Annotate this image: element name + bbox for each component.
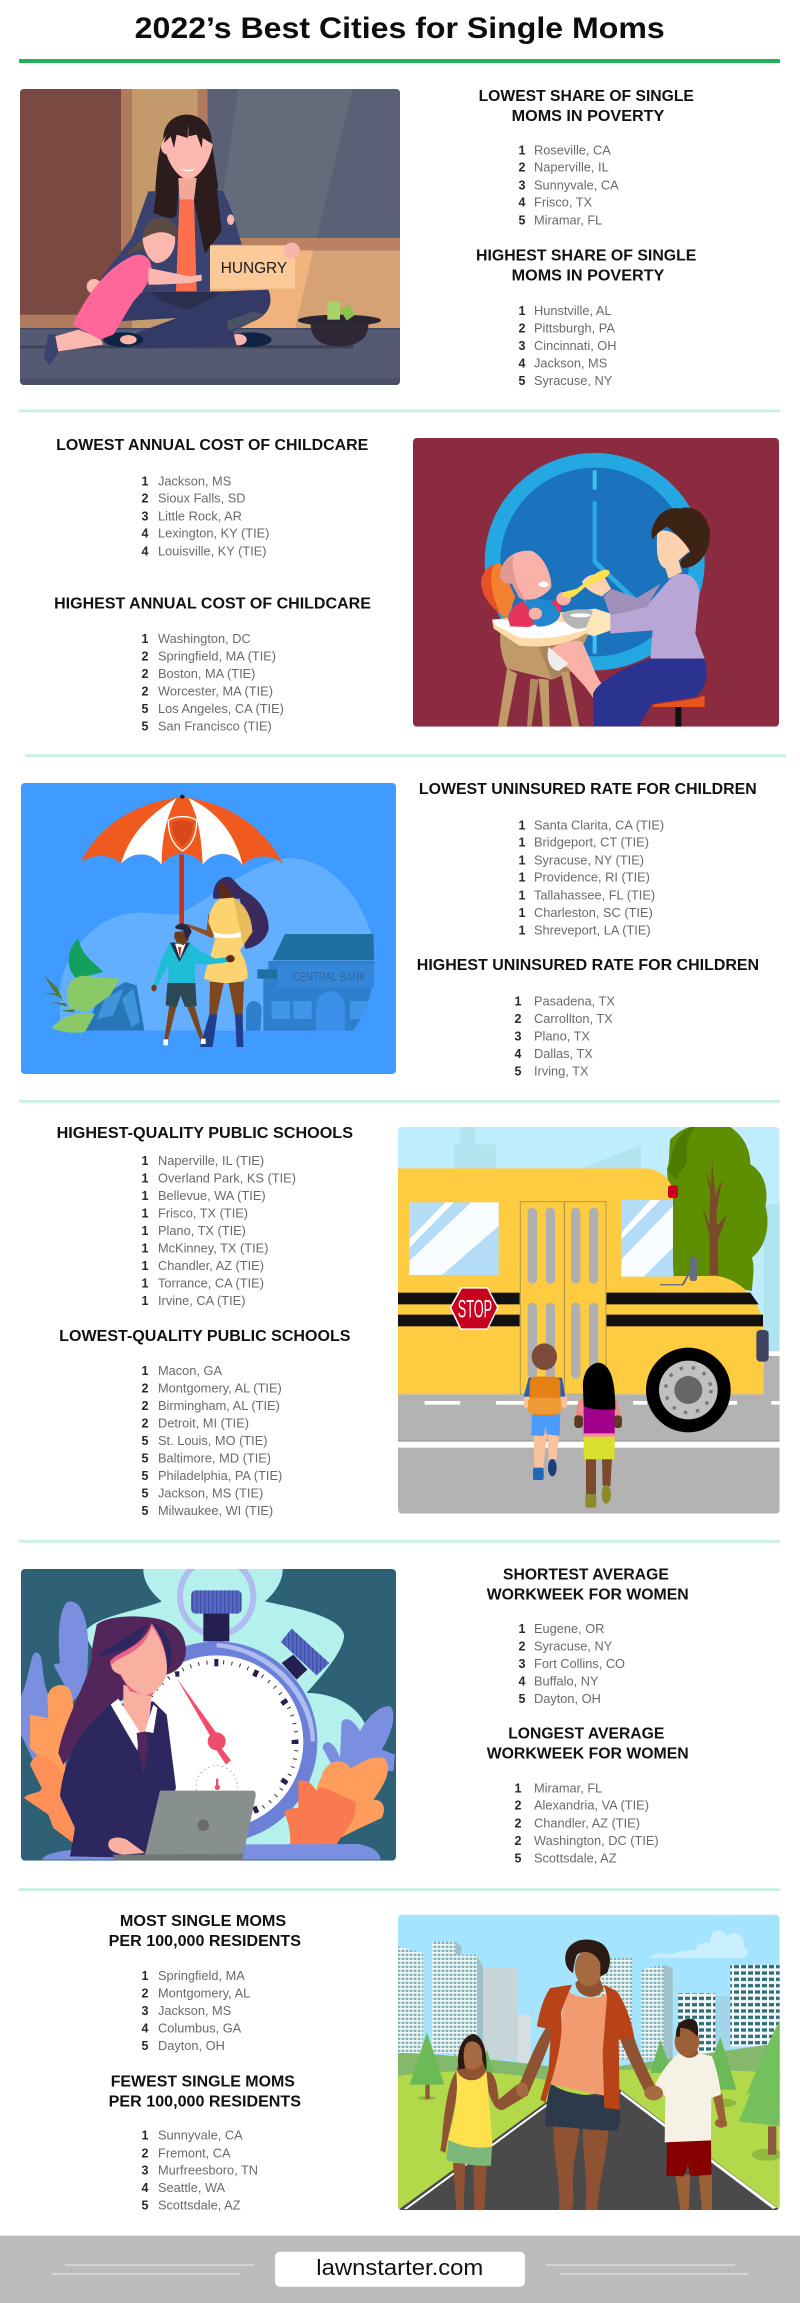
illustration: mother walking with two children in city park [398,1915,782,2210]
list: highest-quality school cities: McKinney, TX (TIE) [158,1240,268,1255]
list: highest-quality school cities: 1 [142,1171,149,1185]
list: shortest workweek cities: 4 [519,1675,526,1689]
list: highest-quality school cities: Chandler, AZ (TIE) [158,1258,264,1273]
list: highest-quality school cities: 1 [142,1276,149,1290]
list: highest-quality school cities: Naperville, IL (TIE) [158,1153,264,1168]
list: highest uninsured cities: 3 [515,1029,522,1043]
heading: lowest-quality public schools: LOWEST-QUALITY PUBLIC SCHOOLS [59,1328,351,1345]
list: lowest-quality school cities [142,1363,282,1518]
list: lowest uninsured cities [519,817,664,937]
list: highest-quality school cities: 1 [142,1189,149,1203]
list: shortest workweek cities: Fort Collins, CO [534,1656,625,1671]
list: fewest single moms cities: 5 [142,2199,149,2213]
list: lowest childcare cities [142,473,269,558]
list: highest childcare cities: 2 [142,667,149,681]
list: highest poverty cities: Cincinnati, OH [534,338,616,353]
list: highest-quality school cities: Overland Park, KS (TIE) [158,1170,296,1185]
list: highest-quality school cities: Bellevue, WA (TIE) [158,1188,266,1203]
list: highest-quality school cities: Torrance, CA (TIE) [158,1275,264,1290]
sign text: hungry: HUNGRY [221,260,288,277]
heading: highest share of single moms in poverty [476,248,697,285]
heading: lowest share of single moms in poverty [479,88,694,125]
list: shortest workweek cities: 1 [519,1622,526,1636]
list: most single moms cities: 2 [142,1986,149,2000]
illustration: mother and son under insurance umbrella [21,783,396,1074]
list: highest childcare cities: San Francisco (TIE) [158,718,272,733]
illustration: woman at laptop with stopwatch [21,1558,396,1861]
list: highest-quality school cities: Frisco, TX (TIE) [158,1205,248,1220]
list: longest workweek cities: Washington, DC (TIE) [534,1833,659,1848]
list: highest childcare cities: Worcester, MA (TIE) [158,683,273,698]
list: lowest poverty cities: Sunnyvale, CA [534,177,619,192]
panel: childcare rankings [54,437,371,733]
panel: poverty rankings [476,88,697,388]
list: lowest-quality school cities: 2 [142,1416,149,1430]
list: longest workweek cities: Chandler, AZ (TIE) [534,1815,640,1830]
list: highest uninsured cities: 2 [515,1012,522,1026]
list: highest poverty cities: 3 [519,339,526,353]
heading: shortest average workweek [487,1567,689,1604]
list: lowest childcare cities: Sioux Falls, SD [158,491,245,506]
panel: single mom population rankings [109,1913,301,2213]
list: lowest-quality school cities: Philadelphia, PA (TIE) [158,1468,282,1483]
heading: shortest average workweek: WORKWEEK FOR WOMEN [487,1587,689,1604]
list: highest poverty cities: Hunstville, AL [534,303,612,318]
list: highest poverty cities [519,303,616,388]
list: lowest-quality school cities: 2 [142,1381,149,1395]
list: shortest workweek cities: Syracuse, NY [534,1639,613,1654]
sign text: central bank: CENTRAL BANK [293,970,366,984]
sign text: stop: STOP [458,1296,492,1324]
footer logo box [275,2252,525,2287]
list: lowest-quality school cities: Montgomery, AL (TIE) [158,1380,282,1395]
list: fewest single moms cities: 2 [142,2146,149,2160]
list: fewest single moms cities: Scottsdale, AZ [158,2198,241,2213]
list: lowest childcare cities: Louisville, KY (TIE) [158,543,267,558]
list: lowest poverty cities [519,142,619,227]
heading: lowest share of single moms in poverty: MOMS IN POVERTY [512,108,665,125]
list: most single moms cities: 5 [142,2039,149,2053]
list: most single moms cities: 4 [142,2021,149,2035]
list: shortest workweek cities: Buffalo, NY [534,1674,599,1689]
list: fewest single moms cities: 1 [142,2129,149,2143]
list: most single moms cities: Jackson, MS [158,2003,231,2018]
list: shortest workweek cities: 2 [519,1640,526,1654]
list: lowest childcare cities: Lexington, KY (TIE) [158,526,269,541]
list: highest uninsured cities: Pasadena, TX [534,993,615,1008]
list: highest poverty cities: Pittsburgh, PA [534,320,615,335]
title: 2022’s Best Cities for Single Moms [135,12,665,45]
list: highest childcare cities: 2 [142,649,149,663]
heading: highest uninsured rate: HIGHEST UNINSURED RATE FOR CHILDREN [417,957,759,974]
list: longest workweek cities: 2 [515,1834,522,1848]
list: lowest uninsured cities: Tallahassee, FL (TIE) [534,887,655,902]
list: longest workweek cities [515,1780,659,1865]
list: highest poverty cities: Syracuse, NY [534,373,613,388]
list: highest childcare cities: Los Angeles, CA (TIE) [158,701,284,716]
list: lowest uninsured cities: 1 [519,888,526,902]
panel: workweek rankings [487,1567,689,1865]
heading: highest share of single moms in poverty: HIGHEST SHARE OF SINGLE [476,248,697,265]
list: lowest childcare cities: 3 [142,509,149,523]
heading: highest annual cost of childcare: HIGHEST ANNUAL COST OF CHILDCARE [54,596,371,613]
list: lowest-quality school cities: 2 [142,1399,149,1413]
list: highest childcare cities: 1 [142,632,149,646]
list: lowest-quality school cities: 5 [142,1469,149,1483]
list: shortest workweek cities [519,1621,625,1706]
list: longest workweek cities: 5 [515,1851,522,1865]
list: lowest poverty cities: Miramar, FL [534,212,602,227]
list: most single moms cities: Dayton, OH [158,2038,225,2053]
illustration: mother feeding baby in high chair [413,438,779,727]
heading: fewest single moms: FEWEST SINGLE MOMS [111,2073,295,2090]
list: lowest uninsured cities: Syracuse, NY (TIE) [534,852,644,867]
list: lowest uninsured cities: Charleston, SC (TIE) [534,905,653,920]
list: highest uninsured cities [515,993,615,1079]
list: highest uninsured cities: Plano, TX [534,1028,590,1043]
list: lowest uninsured cities: 1 [519,853,526,867]
list: lowest poverty cities: Roseville, CA [534,142,611,157]
list: highest childcare cities: Boston, MA (TIE) [158,666,255,681]
list: lowest childcare cities: Little Rock, AR [158,508,242,523]
list: highest poverty cities: 1 [519,304,526,318]
list: highest childcare cities [142,631,284,733]
list: most single moms cities: 1 [142,1969,149,1983]
list: highest uninsured cities: Carrollton, TX [534,1011,613,1026]
list: longest workweek cities: Alexandria, VA (TIE) [534,1798,649,1813]
list: lowest poverty cities: 1 [519,143,526,157]
list: lowest poverty cities: 3 [519,178,526,192]
heading: fewest single moms [109,2073,301,2110]
list: shortest workweek cities: Eugene, OR [534,1621,604,1636]
heading: lowest uninsured rate: LOWEST UNINSURED RATE FOR CHILDREN [419,781,757,798]
list: shortest workweek cities: 5 [519,1692,526,1706]
list: lowest-quality school cities: 5 [142,1486,149,1500]
list: highest poverty cities: 2 [519,321,526,335]
list: highest-quality school cities: 1 [142,1294,149,1308]
list: fewest single moms cities: 4 [142,2181,149,2195]
list: lowest poverty cities: 4 [519,196,526,210]
list: lowest childcare cities: 4 [142,544,149,558]
list: lowest childcare cities: 4 [142,527,149,541]
heading: most single moms [109,1913,301,1950]
panel: uninsured children rankings [417,781,759,1079]
list: lowest uninsured cities: Santa Clarita, CA (TIE) [534,817,664,832]
list: fewest single moms cities [142,2128,258,2213]
list: fewest single moms cities: Murfreesboro, TN [158,2163,258,2178]
list: lowest-quality school cities: Detroit, MI (TIE) [158,1415,249,1430]
list: lowest-quality school cities: St. Louis, MO (TIE) [158,1433,268,1448]
heading: highest share of single moms in poverty: MOMS IN POVERTY [512,268,665,285]
list: highest-quality school cities: 1 [142,1154,149,1168]
list: most single moms cities [142,1968,250,2053]
list: fewest single moms cities: Seattle, WA [158,2180,226,2195]
list: highest childcare cities: Springfield, MA (TIE) [158,648,276,663]
list: most single moms cities: 3 [142,2004,149,2018]
list: highest-quality school cities: 1 [142,1241,149,1255]
list: highest-quality school cities: Irvine, CA (TIE) [158,1293,245,1308]
list: lowest-quality school cities: Jackson, MS (TIE) [158,1485,263,1500]
list: lowest poverty cities: 5 [519,213,526,227]
list: fewest single moms cities: Sunnyvale, CA [158,2128,243,2143]
list: lowest poverty cities: 2 [519,161,526,175]
heading: most single moms: PER 100,000 RESIDENTS [109,1933,301,1950]
list: lowest uninsured cities: 1 [519,871,526,885]
heading: fewest single moms: PER 100,000 RESIDENTS [109,2093,301,2110]
heading: shortest average workweek: SHORTEST AVERAGE [503,1567,669,1584]
list: lowest childcare cities: 1 [142,474,149,488]
list: lowest-quality school cities: Baltimore, MD (TIE) [158,1450,271,1465]
list: longest workweek cities: 2 [515,1816,522,1830]
list: highest-quality school cities: 1 [142,1206,149,1220]
list: lowest uninsured cities: Bridgeport, CT (TIE) [534,835,649,850]
footer bar [0,2236,800,2303]
list: highest uninsured cities: Irving, TX [534,1064,589,1079]
heading: longest average workweek: LONGEST AVERAGE [508,1726,665,1743]
list: highest childcare cities: 5 [142,719,149,733]
panel: public school rankings [57,1125,353,1518]
list: highest-quality school cities: 1 [142,1224,149,1238]
list: highest childcare cities: 5 [142,702,149,716]
heading: lowest annual cost of childcare: LOWEST ANNUAL COST OF CHILDCARE [56,437,369,454]
heading: longest average workweek: WORKWEEK FOR WOMEN [487,1746,689,1763]
list: lowest-quality school cities: Macon, GA [158,1363,222,1378]
heading: lowest share of single moms in poverty: LOWEST SHARE OF SINGLE [479,88,694,105]
illustration: mother and child begging with hungry sign [20,89,400,385]
list: fewest single moms cities: Fremont, CA [158,2145,231,2160]
list: most single moms cities: Montgomery, AL [158,1985,250,2000]
list: highest uninsured cities: 5 [515,1065,522,1079]
list: lowest poverty cities: Naperville, IL [534,160,609,175]
list: highest-quality school cities: 1 [142,1259,149,1273]
list: longest workweek cities: Miramar, FL [534,1780,602,1795]
heading: longest average workweek [487,1726,689,1763]
list: lowest uninsured cities: 1 [519,818,526,832]
list: most single moms cities: Springfield, MA [158,1968,245,1983]
list: shortest workweek cities: Dayton, OH [534,1691,601,1706]
list: lowest uninsured cities: 1 [519,906,526,920]
list: lowest-quality school cities: 5 [142,1504,149,1518]
list: lowest-quality school cities: 1 [142,1364,149,1378]
list: lowest poverty cities: Frisco, TX [534,195,593,210]
illustration: school bus with two children [398,1127,780,1514]
list: lowest-quality school cities: Birmingham, AL (TIE) [158,1398,280,1413]
footer logo box: lawnstarter.com [316,2255,483,2280]
list: highest poverty cities: Jackson, MS [534,355,607,370]
list: lowest uninsured cities: 1 [519,836,526,850]
list: lowest uninsured cities: Shreveport, LA (TIE) [534,922,651,937]
list: lowest childcare cities: 2 [142,492,149,506]
list: lowest-quality school cities: 5 [142,1434,149,1448]
list: longest workweek cities: Scottsdale, AZ [534,1850,617,1865]
list: lowest-quality school cities: 5 [142,1451,149,1465]
list: longest workweek cities: 2 [515,1799,522,1813]
list: lowest-quality school cities: Milwaukee, WI (TIE) [158,1503,273,1518]
list: lowest uninsured cities: 1 [519,923,526,937]
list: most single moms cities: Columbus, GA [158,2020,242,2035]
list: longest workweek cities: 1 [515,1781,522,1795]
list: highest poverty cities: 5 [519,374,526,388]
list: highest uninsured cities: 1 [515,994,522,1008]
list: highest-quality school cities: Plano, TX (TIE) [158,1223,246,1238]
list: highest-quality school cities [142,1153,296,1308]
list: lowest childcare cities: Jackson, MS [158,473,231,488]
heading: highest-quality public schools: HIGHEST-QUALITY PUBLIC SCHOOLS [57,1125,353,1142]
list: highest childcare cities: Washington, DC [158,631,251,646]
list: fewest single moms cities: 3 [142,2164,149,2178]
heading: most single moms: MOST SINGLE MOMS [120,1913,287,1930]
list: highest poverty cities: 4 [519,356,526,370]
list: highest childcare cities: 2 [142,684,149,698]
list: highest uninsured cities: 4 [515,1047,522,1061]
list: shortest workweek cities: 3 [519,1657,526,1671]
list: lowest uninsured cities: Providence, RI (TIE) [534,870,650,885]
list: highest uninsured cities: Dallas, TX [534,1046,593,1061]
